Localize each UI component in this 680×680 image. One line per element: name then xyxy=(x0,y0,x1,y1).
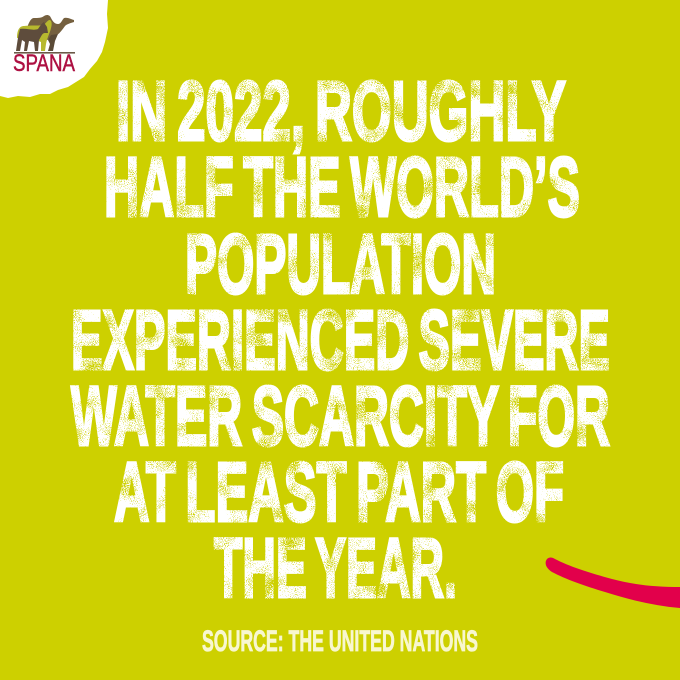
source line: SOURCE: THE UNITED NATIONS xyxy=(202,625,478,658)
logo wordmark: SPANA xyxy=(13,50,75,77)
headline xyxy=(71,64,610,615)
logo rule xyxy=(14,52,75,54)
white corner blob xyxy=(0,0,108,98)
icon: brown camel xyxy=(27,15,74,40)
icon: lime camel xyxy=(17,20,52,51)
icon: camel front legs xyxy=(48,34,58,51)
logo: SPANA xyxy=(13,15,75,77)
red brush stroke xyxy=(546,558,680,608)
icon: donkey xyxy=(16,22,48,51)
headline line 7: THE YEAR. xyxy=(214,521,457,615)
